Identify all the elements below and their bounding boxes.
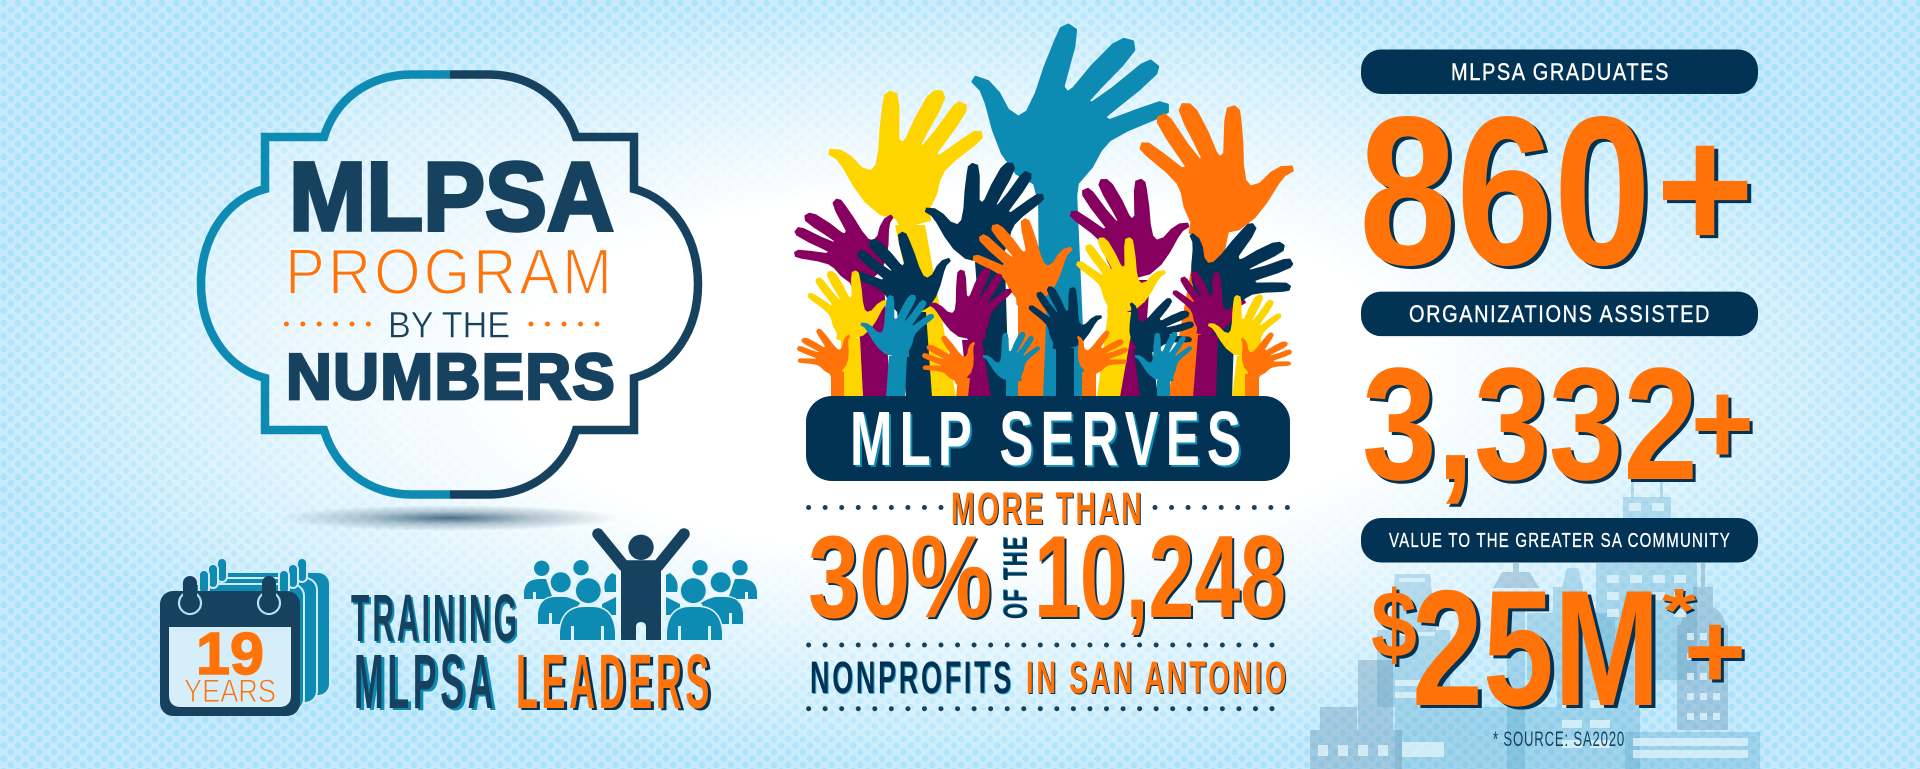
crowd medium people bbox=[538, 572, 743, 624]
skyline illustration bbox=[1310, 480, 1760, 769]
hand: orange small far left bbox=[791, 321, 860, 397]
label years: YEARS bbox=[184, 673, 276, 709]
pill: value to the greater SA community bbox=[1361, 518, 1758, 562]
hand: purple left bbox=[785, 188, 906, 397]
text: more than: MORE THAN bbox=[951, 483, 1144, 534]
hand: navy center low bbox=[1020, 278, 1107, 397]
icon: leader with crowd bbox=[524, 534, 757, 640]
dotted rule bottom bbox=[809, 706, 1288, 711]
orange dots right bbox=[531, 322, 598, 326]
panel: MLP serves banner bbox=[806, 396, 1290, 482]
stat: 10,248: 10,248 bbox=[1034, 511, 1286, 642]
title: PROGRAM: PROGRAM bbox=[285, 235, 615, 308]
stat: 30 percent: 30% bbox=[808, 511, 992, 642]
hand: orange small center right bbox=[1067, 322, 1134, 397]
heading: training MLPSA leaders bbox=[351, 581, 713, 725]
hand: blue small center bbox=[978, 325, 1047, 397]
hand: purple low bbox=[922, 257, 1022, 397]
leader figure bbox=[598, 534, 684, 640]
hand: navy top bbox=[917, 148, 1056, 397]
pill: organizations assisted: ORGANIZATIONS ASSISTED bbox=[1409, 301, 1711, 328]
calendar body bbox=[160, 591, 300, 716]
title: NUMBERS: NUMBERS bbox=[286, 340, 616, 413]
hand: blue small left bbox=[856, 286, 942, 397]
calendar ring left bbox=[179, 576, 201, 614]
calendar ring right bbox=[258, 576, 280, 614]
hand: yellow left bbox=[800, 262, 894, 397]
badge fill bbox=[201, 74, 698, 494]
hand: purple right low bbox=[1164, 263, 1251, 397]
heading: training MLPSA leaders: TRAINING bbox=[351, 581, 520, 656]
crowd large people bbox=[560, 578, 722, 640]
badge outline navy bbox=[450, 74, 698, 494]
text: in San Antonio: IN SAN ANTONIO bbox=[1026, 652, 1289, 703]
hand: orange center bbox=[971, 216, 1073, 397]
text: nonprofits: NONPROFITS bbox=[810, 652, 1014, 703]
text: LEADERS bbox=[516, 639, 713, 725]
banner text: MLP SERVES bbox=[850, 396, 1248, 482]
plus: + bbox=[1656, 91, 1754, 287]
hand: orange small center left bbox=[916, 328, 985, 397]
title: BY THE: BY THE bbox=[388, 304, 510, 346]
title: MLPSA: MLPSA bbox=[289, 142, 614, 251]
stat: 25M: 25M bbox=[1412, 556, 1660, 740]
hand: big blue bbox=[973, 25, 1167, 397]
crowd small people bbox=[524, 560, 757, 615]
pill: value to the greater SA community: VALUE TO THE GREATER SA COMMUNITY bbox=[1389, 530, 1731, 552]
panel: organizations stat bbox=[1361, 292, 1758, 513]
panel: community value stat bbox=[1361, 518, 1758, 751]
asterisk: * bbox=[1662, 577, 1697, 646]
hand: orange small far right bbox=[1231, 324, 1298, 397]
source note: * SOURCE: SA2020 bbox=[1493, 728, 1625, 751]
panel: title badge bbox=[201, 74, 698, 494]
badge outline teal bbox=[201, 74, 450, 494]
dotted rule right of more than bbox=[1155, 505, 1288, 510]
panel: nonprofit statistic bbox=[808, 483, 1289, 709]
hand: navy small right bbox=[1114, 285, 1203, 397]
dotted rule left of more than bbox=[809, 505, 942, 510]
hand: big orange bbox=[1121, 84, 1306, 397]
heading: training MLPSA leaders: MLPSA bbox=[354, 639, 497, 725]
text: of the: OF THE bbox=[997, 535, 1034, 619]
hand: yellow center bbox=[1068, 227, 1171, 397]
pill: organizations assisted bbox=[1361, 292, 1758, 336]
calendar page bbox=[169, 627, 291, 707]
plus: + bbox=[1684, 590, 1746, 711]
hand: navy right bbox=[1168, 206, 1306, 397]
illustration: raised hands bbox=[785, 25, 1306, 397]
panel: graduates stat bbox=[1359, 50, 1758, 309]
hand: purple right bbox=[1058, 165, 1197, 397]
orange dots left bbox=[286, 322, 368, 326]
plus: + bbox=[1691, 358, 1754, 490]
calendar back pages bbox=[185, 558, 330, 711]
stat: dollar sign: $ bbox=[1371, 572, 1417, 678]
icon: calendar 19 years bbox=[160, 558, 330, 716]
hand: yellow small right bbox=[1203, 286, 1290, 397]
badge drop shadow bbox=[280, 505, 620, 531]
stat: 860: 860 bbox=[1359, 72, 1651, 309]
number 19: 19 bbox=[196, 621, 264, 687]
hand: big yellow bbox=[818, 72, 999, 397]
hand: blue small right bbox=[1130, 325, 1199, 397]
hand: navy left bbox=[853, 232, 950, 397]
stat: 3,332: 3,332 bbox=[1362, 334, 1698, 513]
dotted rule middle bbox=[809, 642, 1288, 648]
pill: MLPSA graduates: MLPSA GRADUATES bbox=[1451, 59, 1670, 86]
pill: MLPSA graduates bbox=[1361, 50, 1758, 94]
